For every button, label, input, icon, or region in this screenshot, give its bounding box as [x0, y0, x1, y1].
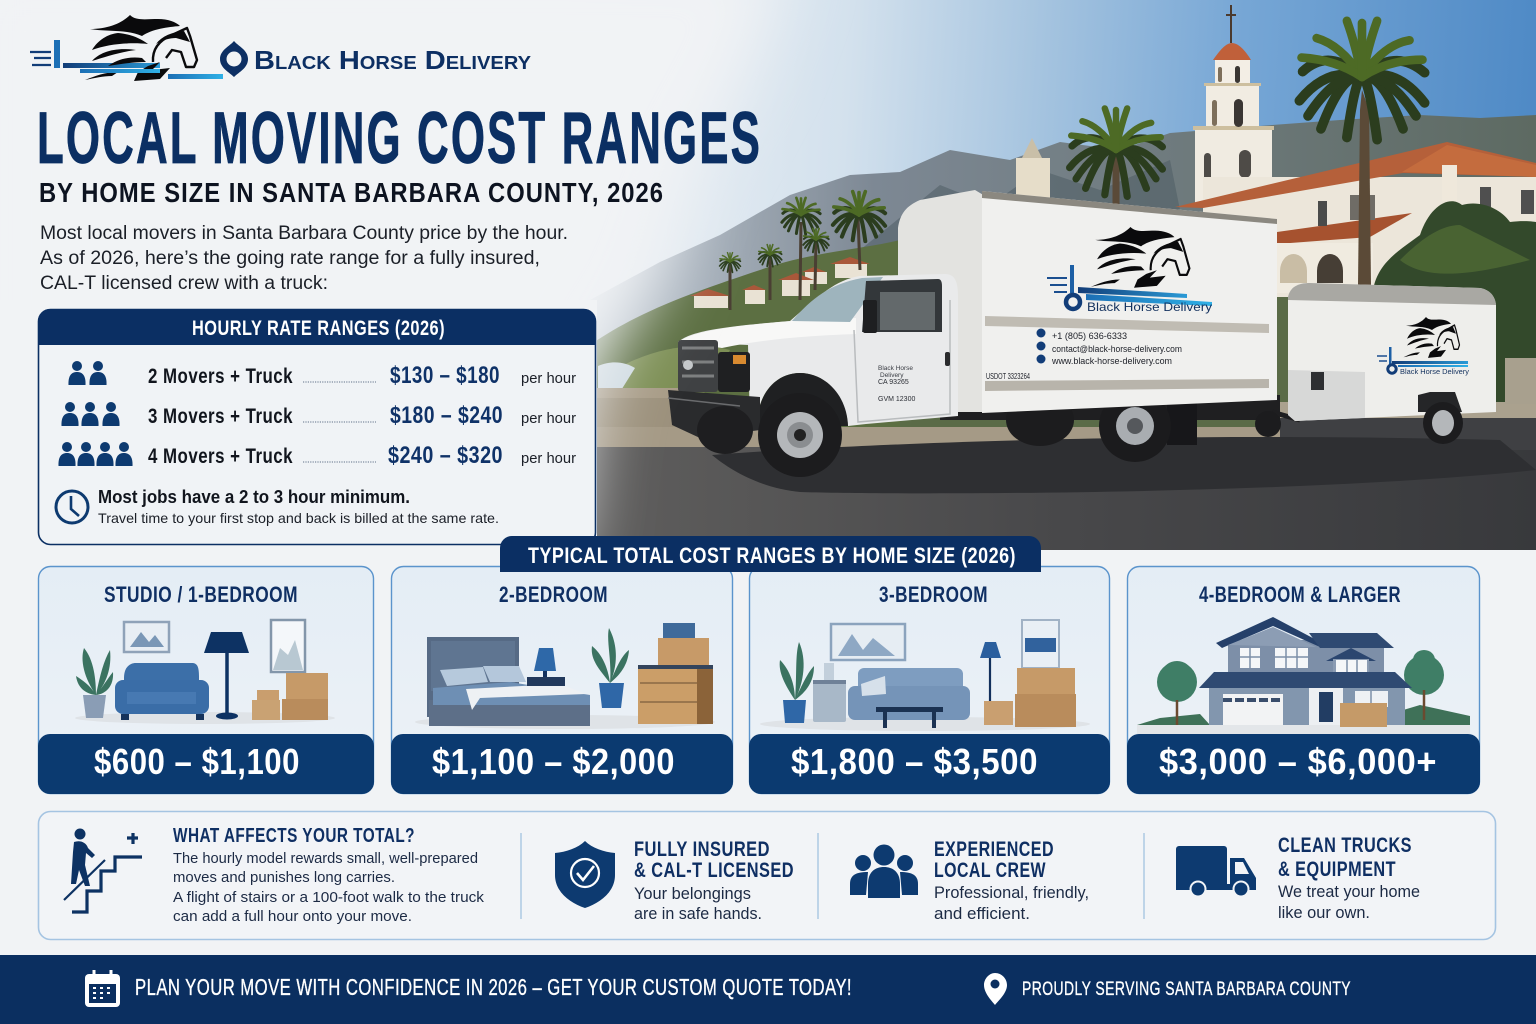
card: 2-bedroom — [391, 566, 733, 794]
minimum note: Travel time to your first stop and back is billed at the same rate. — [98, 510, 499, 526]
row: 4 movers: per hour — [521, 450, 576, 467]
footer service area: PROUDLY SERVING SANTA BARBARA COUNTY — [1022, 979, 1351, 1000]
logo speed lines — [30, 52, 51, 65]
text: clean trucks: like our own. — [1278, 904, 1370, 922]
truck contact details — [986, 328, 1182, 381]
mission building — [1175, 142, 1536, 297]
hillside with homes — [590, 240, 900, 430]
large palm tree — [1299, 21, 1425, 285]
section banner: typical total cost ranges: TYPICAL TOTAL COST RANGES BY HOME SIZE (2026) — [528, 543, 1016, 568]
subtitle: BY HOME SIZE IN SANTA BARBARA COUNTY, 2026 — [39, 177, 664, 208]
price bar: $3,000 – $6,000+ — [1159, 741, 1437, 782]
left fade into page — [590, 0, 780, 536]
intro text — [40, 223, 568, 294]
text: what affects your total: moves and punishes long carries. — [173, 869, 395, 886]
windows — [792, 277, 883, 322]
row: 4 movers: $240 – $320 — [388, 442, 503, 469]
text: clean trucks: & EQUIPMENT — [1278, 858, 1396, 881]
row: 2 movers: 2 Movers + Truck — [148, 365, 293, 388]
truck logo on box: Black Horse Delivery — [1087, 300, 1212, 314]
logo pin — [220, 41, 248, 77]
hood shading — [678, 318, 856, 348]
text: experienced local crew: and efficient. — [934, 905, 1030, 923]
price bar — [1127, 734, 1480, 794]
truck logo on box — [1047, 227, 1212, 314]
wheel arch — [757, 373, 848, 426]
intro text: Most local movers in Santa Barbara County price by the hour. — [40, 223, 568, 244]
footer call to action: PLAN YOUR MOVE WITH CONFIDENCE IN 2026 – GET YOUR CUSTOM QUOTE TODAY! — [135, 974, 852, 1000]
icon: crew — [850, 844, 918, 898]
text: what affects your total: The hourly model rewards small, well-prepared — [173, 850, 478, 867]
row: 3 movers — [61, 402, 576, 429]
price bar: $600 – $1,100 — [94, 741, 300, 782]
intro text: As of 2026, here’s the going rate range for a fully insured, — [40, 248, 540, 269]
cargo trailer — [1255, 283, 1496, 444]
cargo box front — [898, 190, 985, 412]
card heading: 3-BEDROOM — [879, 582, 988, 607]
text: what affects your total — [173, 825, 485, 925]
mountains — [590, 115, 1536, 340]
footer band — [0, 955, 1536, 1024]
logo — [30, 15, 531, 81]
row: 2 movers — [68, 361, 576, 389]
garden tree highlights — [1400, 225, 1530, 274]
text: what affects your total: WHAT AFFECTS YOUR TOTAL? — [173, 825, 415, 847]
garden trees — [1374, 201, 1536, 402]
truck contact details: +1 (805) 636-6333 — [1052, 331, 1127, 341]
text: fully insured — [634, 838, 794, 923]
text: experienced local crew — [934, 838, 1089, 923]
asphalt road — [590, 447, 1536, 550]
left edge cover — [595, 312, 597, 536]
cargo box side — [982, 191, 1277, 413]
background palms — [720, 192, 885, 310]
text: fully insured: & CAL-T LICENSED — [634, 859, 794, 882]
backdrop behind truck — [900, 297, 1288, 427]
sky — [672, 0, 1536, 256]
door lines and text: Delivery — [880, 372, 904, 379]
card: studio / 1-bedroom — [38, 566, 374, 794]
rear wheels — [940, 390, 1280, 462]
text: clean trucks: CLEAN TRUCKS — [1278, 834, 1412, 857]
panel: hourly rate ranges — [38, 309, 596, 544]
mountain shading — [860, 160, 1180, 250]
truck contact details: USDOT 3323264 — [986, 372, 1030, 381]
price bar — [38, 734, 374, 794]
stone wall and sidewalk — [590, 358, 1536, 449]
row: 2 movers: per hour — [521, 370, 576, 387]
text: what affects your total: A flight of stairs or a 100-foot walk to the truck — [173, 889, 485, 906]
panel: benefits strip — [38, 812, 1496, 940]
card heading: 4-BEDROOM & LARGER — [1199, 582, 1401, 607]
text: clean trucks: We treat your home — [1278, 883, 1420, 901]
door lines and text — [854, 300, 950, 422]
icon: clock — [56, 491, 88, 523]
icon: truck — [1176, 846, 1256, 898]
panel header — [38, 309, 596, 345]
card heading: 2-BEDROOM — [499, 582, 608, 607]
side mirror — [863, 300, 877, 333]
small church tower — [1016, 138, 1050, 198]
text: clean trucks — [1278, 834, 1420, 922]
door lines and text: GVM 12300 — [878, 396, 915, 403]
row: 4 movers — [58, 442, 576, 469]
truck contact details: www.black-horse-delivery.com — [1051, 356, 1172, 366]
title: LOCAL MOVING COST RANGES — [37, 98, 762, 179]
box truck — [668, 190, 1280, 477]
row: 3 movers: per hour — [521, 410, 576, 427]
text: fully insured: Your belongings — [634, 885, 751, 903]
icon: shield — [555, 841, 615, 908]
cargo box rails — [982, 191, 1277, 224]
price bar: $1,100 – $2,000 — [432, 741, 675, 782]
mission bell tower — [1193, 5, 1274, 203]
illustration: house — [1137, 617, 1470, 734]
minimum note: Most jobs have a 2 to 3 hour minimum. — [98, 487, 410, 507]
illustration: living room — [760, 620, 1090, 731]
row: 4 movers: 4 Movers + Truck — [148, 445, 293, 468]
intro text: CAL-T licensed crew with a truck: — [40, 273, 328, 294]
door lines and text: Black Horse — [878, 365, 913, 372]
illustration: bedroom — [415, 623, 715, 729]
section banner: typical total cost ranges — [500, 536, 1041, 572]
row: 2 movers: $130 – $180 — [390, 362, 500, 389]
text: experienced local crew: EXPERIENCED — [934, 838, 1054, 861]
grille and bumper — [668, 340, 760, 438]
card: 3-bedroom — [749, 566, 1110, 794]
minimum note — [98, 487, 499, 526]
panel heading: HOURLY RATE RANGES (2026) — [192, 317, 445, 340]
palm tree behind truck — [1070, 108, 1162, 205]
illustration: studio room — [75, 620, 335, 724]
price bar — [749, 734, 1110, 794]
card heading: STUDIO / 1-BEDROOM — [104, 582, 298, 607]
logo horse — [85, 15, 197, 81]
row: 3 movers: 3 Movers + Truck — [148, 405, 293, 428]
card: 4-bedroom and larger — [1127, 566, 1480, 794]
text: experienced local crew: LOCAL CREW — [934, 859, 1046, 882]
truck cab — [678, 274, 958, 426]
icon: map pin — [984, 973, 1007, 1005]
text: what affects your total: can add a full hour onto your move. — [173, 908, 412, 925]
row: 3 movers: $180 – $240 — [390, 402, 503, 429]
front wheels — [697, 406, 842, 477]
truck contact details: contact@black-horse-delivery.com — [1052, 344, 1182, 354]
price bar — [391, 734, 733, 794]
truck shadow — [712, 437, 1536, 493]
icon: calendar — [85, 970, 120, 1007]
cargo trailer: Black Horse Delivery — [1400, 367, 1469, 376]
door lines and text: CA 93265 — [878, 379, 909, 386]
text: experienced local crew: Professional, friendly, — [934, 884, 1089, 902]
price bar: $1,800 – $3,500 — [791, 741, 1038, 782]
text: fully insured: are in safe hands. — [634, 905, 762, 923]
photo: Santa Barbara street scene — [597, 0, 1536, 550]
icon: person climbing stairs — [64, 828, 142, 912]
text: fully insured: FULLY INSURED — [634, 838, 770, 861]
logo wordmark: Black Horse Delivery — [254, 45, 531, 75]
